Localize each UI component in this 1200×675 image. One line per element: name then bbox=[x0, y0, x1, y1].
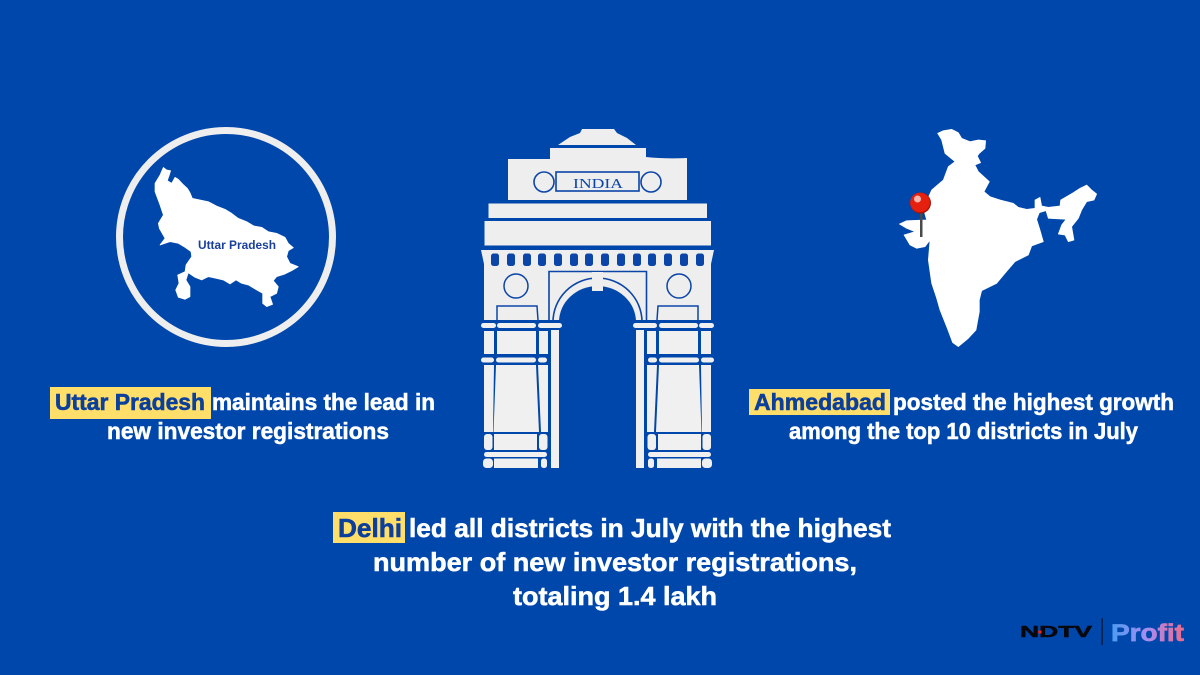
icon: India map bbox=[899, 129, 1097, 347]
right medallion bbox=[641, 172, 661, 192]
Profit wordmark: Profit bbox=[1111, 620, 1184, 647]
highlight bbox=[333, 512, 405, 543]
line two: new investor registrations bbox=[107, 418, 389, 444]
map label: Uttar Pradesh bbox=[198, 240, 276, 252]
highlighted name: Ahmedabad bbox=[754, 389, 886, 415]
arch frame bbox=[549, 272, 646, 322]
line three: totaling 1.4 lakh bbox=[513, 581, 717, 611]
arch ring bbox=[553, 278, 642, 322]
panel: Uttar Pradesh badge bbox=[120, 130, 332, 344]
highlighted name: Delhi bbox=[338, 513, 402, 543]
NDTV wordmark: NDTV bbox=[1020, 624, 1093, 641]
line one: posted the highest growth bbox=[893, 389, 1174, 415]
INDIA nameplate: INDIA bbox=[573, 177, 624, 192]
highlighted name: Uttar Pradesh bbox=[55, 389, 205, 415]
logo red dot bbox=[1038, 630, 1042, 634]
INDIA nameplate bbox=[556, 172, 639, 192]
left medallion bbox=[534, 172, 554, 192]
highlight bbox=[749, 389, 890, 415]
logo: NDTV Profit bbox=[1020, 618, 1184, 647]
badge ring bbox=[120, 130, 332, 344]
roundels bbox=[504, 274, 691, 298]
arch opening bbox=[559, 286, 636, 330]
line two: number of new investor registrations, bbox=[373, 547, 857, 577]
illustration: India Gate bbox=[481, 129, 714, 468]
panel: India map with pin bbox=[899, 129, 1097, 347]
highlight bbox=[50, 387, 211, 419]
logo divider bbox=[1102, 618, 1103, 645]
upper step bbox=[508, 148, 687, 200]
line two: among the top 10 districts in July bbox=[789, 418, 1138, 444]
frieze and spandrels bbox=[481, 250, 714, 322]
callout: Delhi bbox=[333, 512, 891, 611]
callout: Uttar Pradesh bbox=[50, 387, 435, 444]
line one: maintains the lead in bbox=[212, 389, 435, 415]
left pier bbox=[481, 306, 564, 468]
line one: led all districts in July with the highest bbox=[409, 513, 891, 543]
icon: map pin bbox=[910, 192, 931, 237]
frieze windows bbox=[491, 254, 704, 266]
entablature bands bbox=[484, 204, 711, 246]
callout: Ahmedabad bbox=[749, 389, 1174, 444]
icon: Uttar Pradesh map bbox=[155, 167, 298, 307]
right pier bbox=[631, 306, 714, 468]
dome bbox=[558, 129, 636, 145]
keystone bbox=[592, 272, 603, 291]
